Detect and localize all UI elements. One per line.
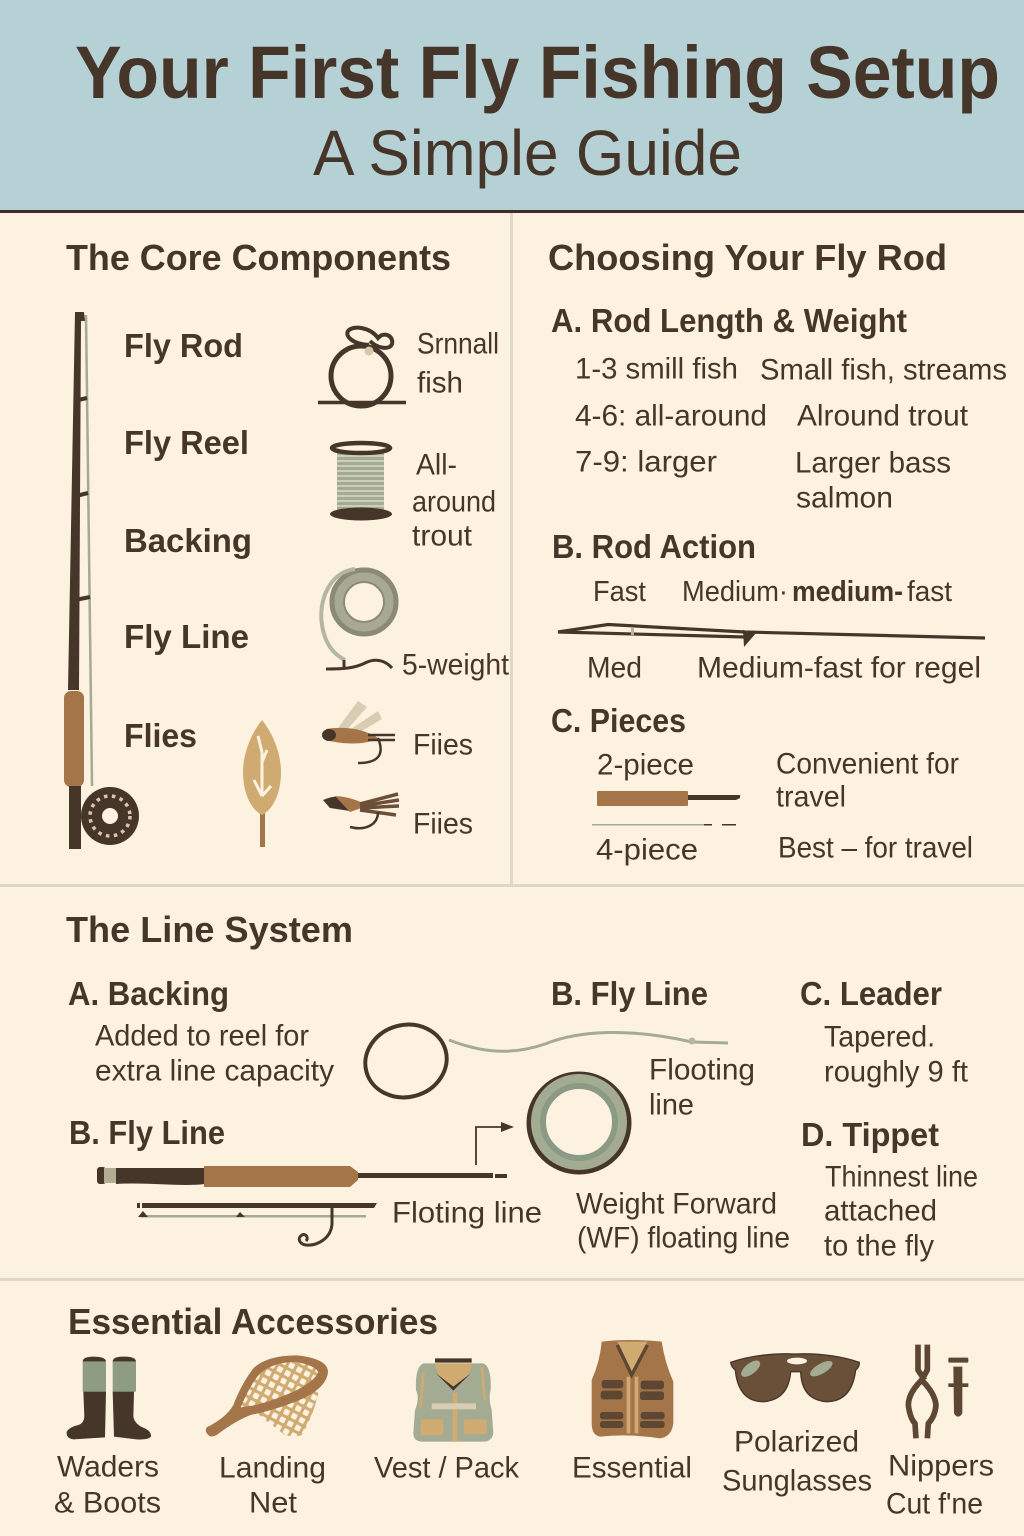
panel: line system bbox=[66, 909, 978, 1262]
panel: essential accessories bbox=[54, 1301, 994, 1520]
text: four-piece: 4-piece bbox=[596, 833, 698, 866]
text: landing net: Net bbox=[249, 1486, 298, 1519]
block: leader bbox=[800, 975, 969, 1088]
text: vest pack: Vest / Pack bbox=[374, 1451, 520, 1484]
text: small fish: Srnnall bbox=[417, 327, 499, 360]
icon: fly one bbox=[322, 701, 395, 763]
icon: fly two bbox=[323, 794, 399, 828]
text: flies one: Fiies bbox=[413, 728, 473, 761]
text: nippers bbox=[886, 1449, 994, 1520]
label: fly reel: Fly Reel bbox=[124, 424, 249, 461]
text: convenient for travel: Convenient for bbox=[776, 747, 959, 780]
text: all-around trout: trout bbox=[412, 519, 473, 552]
block: tippet: D. Tippet bbox=[801, 1116, 939, 1153]
heading: choosing your fly rod: Choosing Your Fly Rod bbox=[548, 237, 947, 278]
labels: rod action top: Fast bbox=[593, 576, 646, 608]
block: backing: Added to reel for bbox=[95, 1019, 309, 1052]
text: two-piece: 2-piece bbox=[597, 748, 694, 781]
diagram: line and hook bbox=[137, 1203, 377, 1245]
icon: vest pack bbox=[413, 1358, 493, 1442]
table: rod weights: salmon bbox=[796, 481, 893, 514]
text: waders and boots: & Boots bbox=[54, 1486, 161, 1519]
label: fly rod: Fly Rod bbox=[124, 327, 243, 364]
text: weight forward: Weight Forward bbox=[576, 1187, 777, 1220]
heading: essential accessories: Essential Accessories bbox=[68, 1301, 438, 1342]
subheading: rod action: B. Rod Action bbox=[552, 528, 756, 565]
block: backing: A. Backing bbox=[68, 975, 229, 1012]
labels: rod action top bbox=[593, 576, 952, 608]
arrow: to coil bbox=[476, 1122, 514, 1165]
text: all-around trout bbox=[412, 448, 496, 552]
table: rod weights bbox=[575, 352, 1007, 514]
text: 5-weight: 5-weight bbox=[402, 648, 510, 681]
icon: polarized sunglasses bbox=[731, 1354, 859, 1402]
text: weight forward bbox=[576, 1187, 790, 1254]
subheading: pieces: C. Pieces bbox=[551, 702, 686, 739]
text: landing net bbox=[219, 1451, 326, 1519]
text: flooting line bbox=[649, 1053, 755, 1121]
table: rod weights: 7-9: larger bbox=[575, 445, 717, 478]
subtitle: A Simple Guide bbox=[313, 117, 742, 189]
block: backing bbox=[68, 975, 334, 1087]
icon: landing net bbox=[206, 1355, 328, 1436]
icon: leaf bbox=[243, 720, 281, 847]
table: rod weights: Larger bass bbox=[795, 446, 951, 479]
labels: rod action top: fast bbox=[907, 576, 952, 608]
panel: core components bbox=[64, 237, 510, 849]
diagram: backing loop and line bbox=[357, 1016, 728, 1106]
subheading: rod length and weight: A. Rod Length & Weight bbox=[551, 302, 907, 339]
labels: rod action bottom: Med bbox=[587, 651, 642, 684]
panel: choosing your fly rod bbox=[548, 237, 1007, 866]
text: flooting line: line bbox=[649, 1088, 694, 1121]
icon: waders and boots bbox=[67, 1357, 151, 1439]
table: rod weights: 4-6: all-around bbox=[575, 399, 767, 432]
block: tippet: Thinnest line bbox=[825, 1160, 978, 1193]
text: convenient for travel: travel bbox=[776, 780, 846, 813]
block: leader: C. Leader bbox=[800, 975, 942, 1012]
block: leader: roughly 9 ft bbox=[824, 1055, 969, 1088]
text: flooting line: Flooting bbox=[649, 1053, 755, 1086]
text: flies two: Fiies bbox=[413, 807, 473, 840]
text: all-around trout: All- bbox=[416, 448, 457, 481]
text: polarized sunglasses: Sunglasses bbox=[722, 1464, 872, 1497]
text: nippers: Nippers bbox=[888, 1449, 994, 1482]
icon: fly line coil bbox=[321, 569, 396, 669]
block: tippet: attached bbox=[824, 1194, 937, 1227]
header banner bbox=[0, 0, 1024, 213]
block: leader: Tapered. bbox=[824, 1020, 935, 1053]
label: flies: Flies bbox=[124, 717, 197, 754]
diagram: rod pieces bbox=[592, 791, 740, 826]
block: tippet bbox=[801, 1116, 978, 1262]
text: waders and boots: Waders bbox=[57, 1450, 159, 1483]
text: landing net: Landing bbox=[219, 1451, 326, 1484]
text: small fish: fish bbox=[417, 366, 463, 399]
text: essential: Essential bbox=[572, 1451, 692, 1484]
text: all-around trout: around bbox=[412, 485, 496, 518]
icon: fly rod and reel bbox=[64, 312, 139, 849]
heading: the line system: The Line System bbox=[66, 909, 353, 950]
diagram: rod action taper bbox=[558, 624, 985, 647]
icon: knot loop bbox=[318, 328, 406, 406]
text: small fish bbox=[417, 327, 499, 399]
table: rod weights: Small fish, streams bbox=[760, 353, 1007, 386]
labels: rod action top: medium- bbox=[792, 576, 903, 608]
block: fly line heading top: B. Fly Line bbox=[551, 975, 708, 1012]
text: floting line: Floting line bbox=[392, 1196, 542, 1229]
text: convenient for travel bbox=[776, 747, 959, 813]
icon: nippers bbox=[908, 1345, 968, 1438]
text: waders and boots bbox=[54, 1450, 161, 1519]
labels: rod action bottom: Medium-fast for regel bbox=[697, 651, 981, 684]
block: backing: extra line capacity bbox=[95, 1054, 334, 1087]
text: polarized sunglasses: Polarized bbox=[734, 1425, 859, 1458]
heading: fly line left: B. Fly Line bbox=[69, 1114, 225, 1151]
text: weight forward: (WF) floating line bbox=[577, 1221, 790, 1254]
labels: rod action top: Medium· bbox=[682, 576, 788, 608]
text: best for travel: Best – for travel bbox=[778, 831, 973, 864]
icon: backing spool bbox=[330, 443, 392, 520]
icon: line coil bbox=[529, 1074, 629, 1172]
label: fly line: Fly Line bbox=[124, 618, 249, 655]
icon: essential vest bbox=[592, 1340, 673, 1438]
block: tippet: to the fly bbox=[824, 1229, 934, 1262]
label: backing: Backing bbox=[124, 522, 252, 559]
table: rod weights: 1-3 smill fish bbox=[575, 352, 738, 385]
heading: the core components: The Core Components bbox=[66, 237, 451, 278]
text: nippers: Cut f'ne bbox=[886, 1487, 983, 1520]
table: rod weights: Alround trout bbox=[797, 399, 969, 432]
text: polarized sunglasses bbox=[722, 1425, 872, 1497]
diagram: rod butt and shaft bbox=[97, 1166, 507, 1187]
